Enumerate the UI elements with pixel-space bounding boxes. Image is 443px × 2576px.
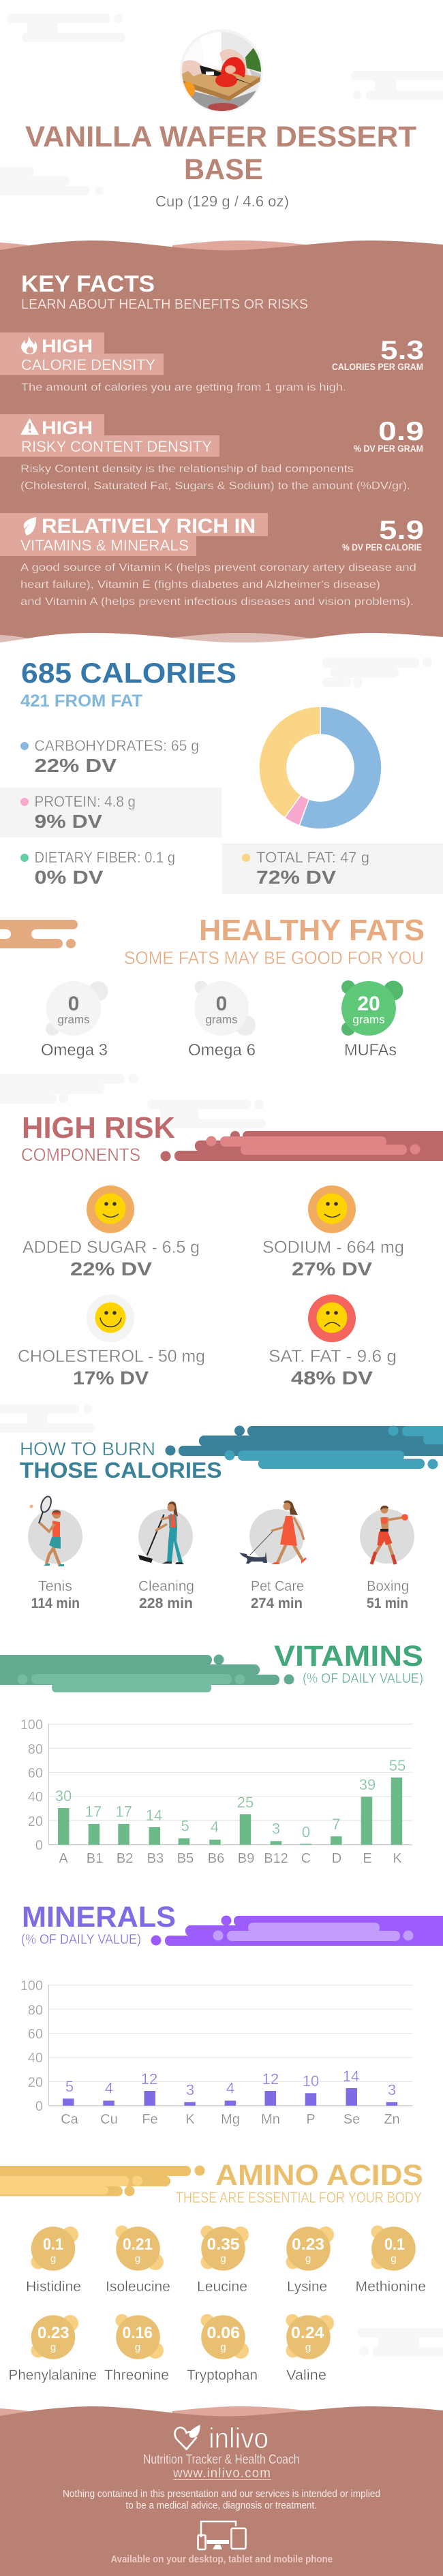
- bar chart: minerals: P: [306, 2112, 316, 2127]
- fact: risky content density: Risky Content density is the relationship of bad components: [20, 463, 354, 475]
- bar chart: minerals: 4: [105, 2080, 113, 2097]
- calories heading: 685 CALORIES: [21, 657, 236, 689]
- activity: tennis: [28, 1495, 82, 1611]
- bar chart: vitamins: 14: [146, 1807, 162, 1824]
- bar chart: vitamins: 0: [302, 1824, 310, 1841]
- heading: healthy fats: HEALTHY FATS: [199, 914, 425, 947]
- amino: threonine: [104, 2314, 169, 2383]
- bar chart: vitamins: 80: [28, 1742, 43, 1757]
- bar chart: vitamins: 7: [332, 1816, 341, 1833]
- fat: mufas: 20: [357, 993, 380, 1015]
- fact: calorie density: HIGH: [42, 336, 93, 356]
- fact: vitamins and minerals: and Vitamin A (helps prevent infectious diseases and vision problems).: [20, 596, 414, 608]
- website: www.inlivo.com: [172, 2466, 271, 2481]
- amino: histidine: Histidine: [26, 2279, 81, 2295]
- risk: cholesterol: [18, 1294, 205, 1388]
- risk: saturated fat: 48% DV: [291, 1367, 373, 1388]
- bar chart: minerals: Mg: [221, 2112, 240, 2127]
- blob: how to burn: [165, 1425, 443, 1469]
- bar chart: vitamins: 17: [85, 1803, 102, 1820]
- bar chart: minerals: 10: [303, 2073, 319, 2090]
- nutrient: total fat: 72% DV: [256, 867, 336, 888]
- fat: omega 6: 0: [216, 993, 227, 1015]
- fact: risky content density: RISKY CONTENT DENSITY: [21, 438, 212, 455]
- amino: methionine: [356, 2225, 426, 2295]
- amino: phenylalanine: Phenylalanine: [8, 2368, 97, 2383]
- heading: amino acids: AMINO ACIDS: [215, 2159, 423, 2192]
- icon: devices: [198, 2521, 245, 2549]
- fact: risky content density: (Cholesterol, Saturated Fat, Sugars & Sodium) to the amount (%DV/gr).: [20, 480, 410, 492]
- fact: risky content density: 0.9: [378, 417, 424, 446]
- fat: omega 3: Omega 3: [41, 1041, 108, 1059]
- fact: vitamins and minerals: heart failure), Vitamin E (fights diabetes and Alzheimer's disease): [20, 579, 380, 591]
- bar chart: vitamins: 0: [35, 1838, 43, 1853]
- bar chart: vitamins: [20, 1718, 412, 1866]
- amino: methionine: 0.1: [384, 2235, 405, 2254]
- amino: valine: g: [305, 2342, 311, 2353]
- bar chart: vitamins: C: [301, 1851, 311, 1866]
- heading: high risk: HIGH RISK: [22, 1111, 175, 1145]
- risk: saturated fat: SAT. FAT - 9.6 g: [269, 1347, 397, 1366]
- activity: boxing: 51 min: [367, 1596, 408, 1611]
- nutrient: dietary fiber: [20, 849, 175, 888]
- availability note: Available on your desktop, tablet and mobile phone: [110, 2554, 333, 2565]
- amino: isoleucine: Isoleucine: [106, 2279, 170, 2295]
- fat: mufas: MUFAs: [344, 1041, 397, 1059]
- bar chart: vitamins: E: [363, 1851, 372, 1866]
- nutrient: carbohydrates: CARBOHYDRATES: 65 g: [34, 737, 199, 754]
- amino: methionine: g: [391, 2253, 397, 2265]
- fact: calorie density: 5.3: [380, 336, 424, 365]
- amino: tryptophan: Tryptophan: [187, 2368, 258, 2383]
- bar chart: minerals: 12: [262, 2070, 279, 2088]
- subheading: LEARN ABOUT HEALTH BENEFITS OR RISKS: [21, 297, 308, 312]
- fact: calorie density: CALORIES PER GRAM: [332, 362, 423, 372]
- amino: tryptophan: [187, 2314, 258, 2383]
- fact: vitamins and minerals: % DV PER CALORIE: [342, 542, 422, 553]
- activity: cleaning: [138, 1502, 194, 1611]
- fact: vitamins and minerals: 5.9: [379, 516, 424, 545]
- subheading: components: COMPONENTS: [21, 1145, 140, 1165]
- fact: risky content density: % DV PER GRAM: [354, 444, 423, 454]
- nutrient: dietary fiber: 0% DV: [34, 867, 104, 888]
- fact: vitamins and minerals: [0, 513, 424, 608]
- bar chart: vitamins: 25: [237, 1794, 254, 1811]
- risk: added sugar: ADDED SUGAR - 6.5 g: [22, 1238, 200, 1257]
- logo heart: [175, 2425, 200, 2449]
- calories from fat: 421 FROM FAT: [20, 692, 142, 711]
- fat: omega 6: grams: [205, 1013, 238, 1026]
- blob: minerals: [151, 1916, 443, 1946]
- amino: histidine: [26, 2226, 81, 2295]
- activity: boxing: Boxing: [367, 1579, 409, 1594]
- bar chart: minerals: 0: [35, 2099, 43, 2114]
- activity: cleaning: Cleaning: [138, 1579, 194, 1594]
- bar chart: minerals: [20, 1978, 412, 2127]
- disclaimer: [63, 2488, 380, 2511]
- bar chart: vitamins: B6: [208, 1851, 224, 1866]
- blob: high risk: [161, 1131, 443, 1161]
- blob: healthy fats: [0, 920, 78, 948]
- fat: omega 3: [41, 981, 108, 1059]
- fact: calorie density: The amount of calories you are getting from 1 gram is high.: [21, 382, 346, 394]
- bar chart: vitamins: 100: [20, 1718, 43, 1733]
- food photo: [180, 29, 263, 112]
- amino: valine: 0.24: [291, 2324, 324, 2342]
- fact: risky content density: [0, 414, 424, 492]
- nutrient: total fat: TOTAL FAT: 47 g: [256, 849, 369, 866]
- activity: pet care: [239, 1500, 307, 1611]
- risk: cholesterol: CHOLESTEROL - 50 mg: [18, 1347, 205, 1366]
- fat: omega 3: grams: [57, 1013, 90, 1026]
- bar chart: vitamins: B2: [117, 1851, 133, 1866]
- amino: phenylalanine: 0.23: [37, 2324, 70, 2342]
- heading: how to burn: HOW TO BURN: [20, 1438, 155, 1459]
- fact: vitamins and minerals: A good source of Vitamin K (helps prevent coronary artery disease and: [20, 562, 416, 574]
- bar chart: minerals: Se: [343, 2112, 360, 2127]
- amino: isoleucine: [106, 2225, 170, 2295]
- donut chart: [259, 707, 382, 829]
- risk: sodium: SODIUM - 664 mg: [262, 1238, 404, 1257]
- amino: leucine: Leucine: [197, 2279, 247, 2295]
- amino: threonine: Threonine: [104, 2368, 169, 2383]
- bar chart: vitamins: B9: [238, 1851, 254, 1866]
- bar chart: minerals: 12: [141, 2070, 157, 2088]
- tagline: Nutrition Tracker & Health Coach: [143, 2453, 300, 2467]
- bar chart: minerals: 40: [28, 2051, 43, 2066]
- amino: tryptophan: g: [220, 2342, 226, 2353]
- bar chart: minerals: 4: [226, 2080, 234, 2097]
- bar chart: vitamins: K: [393, 1851, 402, 1866]
- title: [25, 121, 416, 186]
- risk: cholesterol: 17% DV: [73, 1367, 149, 1388]
- fact: calorie density: [0, 332, 424, 394]
- subheading: minerals: (% OF DAILY VALUE): [21, 1932, 141, 1947]
- amino: isoleucine: g: [135, 2253, 140, 2265]
- fat: omega 3: 0: [68, 993, 79, 1015]
- title: BASE: [184, 153, 263, 186]
- bar chart: minerals: 20: [28, 2075, 43, 2090]
- amino: lysine: [286, 2226, 334, 2295]
- fact: calorie density: CALORIE DENSITY: [21, 356, 155, 373]
- bar chart: minerals: Zn: [384, 2112, 400, 2127]
- amino: threonine: g: [135, 2342, 140, 2353]
- nutrient: carbohydrates: 22% DV: [34, 755, 117, 776]
- activity: cleaning: 228 min: [139, 1596, 193, 1611]
- fat: omega 6: [188, 981, 256, 1059]
- bar chart: minerals: Fe: [142, 2112, 158, 2127]
- amino: methionine: Methionine: [356, 2279, 426, 2295]
- nutrient: dietary fiber: DIETARY FIBER: 0.1 g: [34, 849, 175, 866]
- amino: leucine: [197, 2225, 249, 2295]
- risk: sodium: 27% DV: [292, 1258, 372, 1279]
- title: VANILLA WAFER DESSERT: [25, 121, 416, 153]
- amino: lysine: g: [305, 2253, 311, 2265]
- bar chart: minerals: Cu: [100, 2112, 118, 2127]
- amino: histidine: g: [50, 2253, 56, 2265]
- disclaimer: Nothing contained in this presentation and our services is intended or implied: [63, 2488, 380, 2500]
- heading: minerals: MINERALS: [22, 1901, 176, 1934]
- bar chart: minerals: K: [185, 2112, 195, 2127]
- amino: phenylalanine: g: [50, 2342, 56, 2353]
- amino: isoleucine: 0.21: [123, 2235, 153, 2254]
- risk: added sugar: 22% DV: [70, 1258, 152, 1279]
- activity: pet care: Pet Care: [251, 1579, 304, 1594]
- amino: lysine: Lysine: [287, 2279, 327, 2295]
- activity: boxing: [360, 1506, 414, 1611]
- footer panel: [0, 2406, 443, 2576]
- bar chart: vitamins: 5: [181, 1818, 189, 1835]
- disclaimer: to be a medical advice, diagnosis or treatment.: [125, 2500, 317, 2511]
- amino: threonine: 0.16: [123, 2324, 153, 2342]
- activity: tennis: 114 min: [31, 1596, 80, 1611]
- bar chart: minerals: 3: [388, 2081, 396, 2098]
- bar chart: vitamins: A: [59, 1851, 68, 1866]
- amino: lysine: 0.23: [292, 2235, 324, 2254]
- amino: leucine: 0.35: [207, 2235, 240, 2254]
- risk: added sugar: [22, 1185, 200, 1279]
- bar chart: minerals: Ca: [61, 2112, 79, 2127]
- bar chart: minerals: Mn: [261, 2112, 280, 2127]
- amino: valine: [286, 2314, 334, 2383]
- bar chart: minerals: 80: [28, 2003, 43, 2018]
- nutrient: protein: [0, 788, 222, 837]
- blob: amino acids: [0, 2165, 204, 2197]
- bar chart: vitamins: D: [332, 1851, 341, 1866]
- bar chart: vitamins: B12: [264, 1851, 288, 1866]
- activity: tennis: Tenis: [38, 1579, 72, 1594]
- bar chart: vitamins: B1: [87, 1851, 103, 1866]
- amino: histidine: 0.1: [43, 2235, 63, 2254]
- activity: pet care: 274 min: [251, 1596, 303, 1611]
- bar chart: minerals: 100: [20, 1978, 43, 1993]
- logo wordmark: inlivo: [209, 2422, 269, 2454]
- bar chart: vitamins: 3: [272, 1820, 280, 1837]
- subheading: vitamins: (% OF DAILY VALUE): [303, 1671, 423, 1686]
- amino: phenylalanine: [8, 2315, 97, 2383]
- bar chart: vitamins: 40: [28, 1790, 43, 1805]
- heading: key facts: KEY FACTS: [21, 271, 155, 297]
- bar chart: minerals: 60: [28, 2027, 43, 2042]
- fat: mufas: grams: [352, 1013, 385, 1026]
- bar chart: vitamins: 20: [28, 1814, 43, 1829]
- fat: mufas: [341, 980, 403, 1059]
- fat: omega 6: Omega 6: [188, 1041, 256, 1059]
- bar chart: vitamins: 55: [389, 1757, 406, 1774]
- bar chart: vitamins: 60: [28, 1766, 43, 1781]
- amino: valine: Valine: [286, 2368, 326, 2383]
- risk: saturated fat: [269, 1294, 397, 1388]
- bar chart: vitamins: 39: [359, 1776, 376, 1793]
- fact: vitamins and minerals: VITAMINS & MINERALS: [20, 537, 189, 554]
- subheading: healthy fats: SOME FATS MAY BE GOOD FOR YOU: [124, 948, 424, 968]
- bar chart: minerals: 3: [186, 2081, 194, 2098]
- heading: those calories: THOSE CALORIES: [20, 1458, 222, 1483]
- blob: vitamins: [0, 1654, 294, 1692]
- bar chart: vitamins: 4: [211, 1818, 219, 1835]
- bar chart: minerals: 14: [343, 2068, 359, 2085]
- amino: tryptophan: 0.06: [207, 2324, 240, 2342]
- panel: key facts: [0, 240, 443, 642]
- serving size: Cup (129 g / 4.6 oz): [155, 193, 289, 210]
- nutrient: carbohydrates: [20, 737, 199, 776]
- fact: risky content density: HIGH: [42, 418, 93, 438]
- bar chart: vitamins: B3: [147, 1851, 164, 1866]
- nutrient: protein: PROTEIN: 4.8 g: [34, 793, 136, 810]
- risk: sodium: [262, 1185, 404, 1279]
- bar chart: vitamins: 30: [55, 1787, 72, 1804]
- bar chart: vitamins: B5: [177, 1851, 194, 1866]
- bar chart: vitamins: 17: [115, 1803, 132, 1820]
- amino: leucine: g: [220, 2253, 226, 2265]
- fact: vitamins and minerals: RELATIVELY RICH IN: [42, 515, 256, 538]
- bar chart: minerals: 5: [65, 2078, 74, 2095]
- nutrient: total fat: [222, 843, 443, 894]
- heading: vitamins: VITAMINS: [274, 1640, 423, 1673]
- nutrient: protein: 9% DV: [34, 811, 102, 832]
